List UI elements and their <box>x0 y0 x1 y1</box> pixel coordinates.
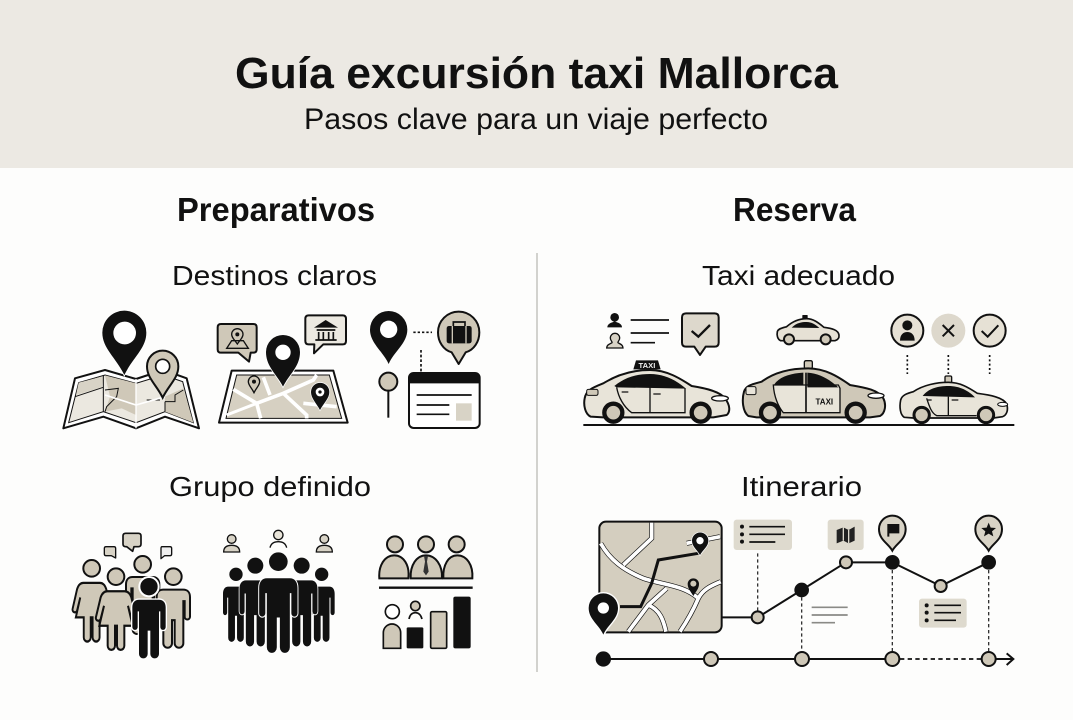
line chart with milestones <box>722 553 996 652</box>
road line <box>583 422 1014 428</box>
icon: flag pin <box>879 516 906 551</box>
title: Guía excursión taxi Mallorca <box>235 49 839 98</box>
note card: map icon <box>828 520 864 550</box>
header band <box>0 0 1073 168</box>
icon: passenger, cross and check circles <box>891 314 1006 374</box>
subheading: Taxi adecuado: Taxi adecuado <box>702 260 895 291</box>
timeline with arrow <box>596 651 1013 667</box>
icon: star pin <box>975 516 1002 551</box>
note card: lower list <box>919 599 967 628</box>
subheading: Destinos claros: Destinos claros <box>172 260 377 291</box>
column divider <box>536 253 538 672</box>
icon: small taxi <box>777 315 839 344</box>
subtitle: Pasos clave para un viaje perfecto <box>304 103 768 136</box>
panel: group icons <box>73 530 473 658</box>
icon: taxi with door label: TAXI <box>816 397 833 406</box>
icon: mixed group with speech bubbles <box>73 533 190 658</box>
subheading: Grupo definido: Grupo definido <box>169 471 371 502</box>
panel: taxi icons <box>583 313 1014 425</box>
icon: route map <box>589 522 722 635</box>
icon: taxi with door label <box>743 361 885 422</box>
panel: destinos icons <box>63 311 480 428</box>
icon: pin, luggage bubble and calendar <box>370 311 480 428</box>
icon: taxi with roof sign <box>584 360 729 422</box>
icon: large group with members above <box>223 530 335 653</box>
heading: Reserva: Reserva <box>733 191 857 228</box>
note card: upper list <box>734 520 792 550</box>
icon: people and bar chart <box>379 536 473 648</box>
icon: taxi with roof sign: TAXI <box>639 361 655 370</box>
heading: Preparativos: Preparativos <box>177 191 375 228</box>
icon: passenger list with check bubble <box>607 313 719 355</box>
panel: itinerary chart <box>589 516 1013 667</box>
icon: folded map with pins <box>63 311 199 428</box>
icon: compact taxi <box>900 376 1008 423</box>
grey text lines <box>812 607 848 623</box>
subheading: Itinerario: Itinerario <box>741 471 862 502</box>
icon: city map with speech bubbles <box>218 315 348 423</box>
